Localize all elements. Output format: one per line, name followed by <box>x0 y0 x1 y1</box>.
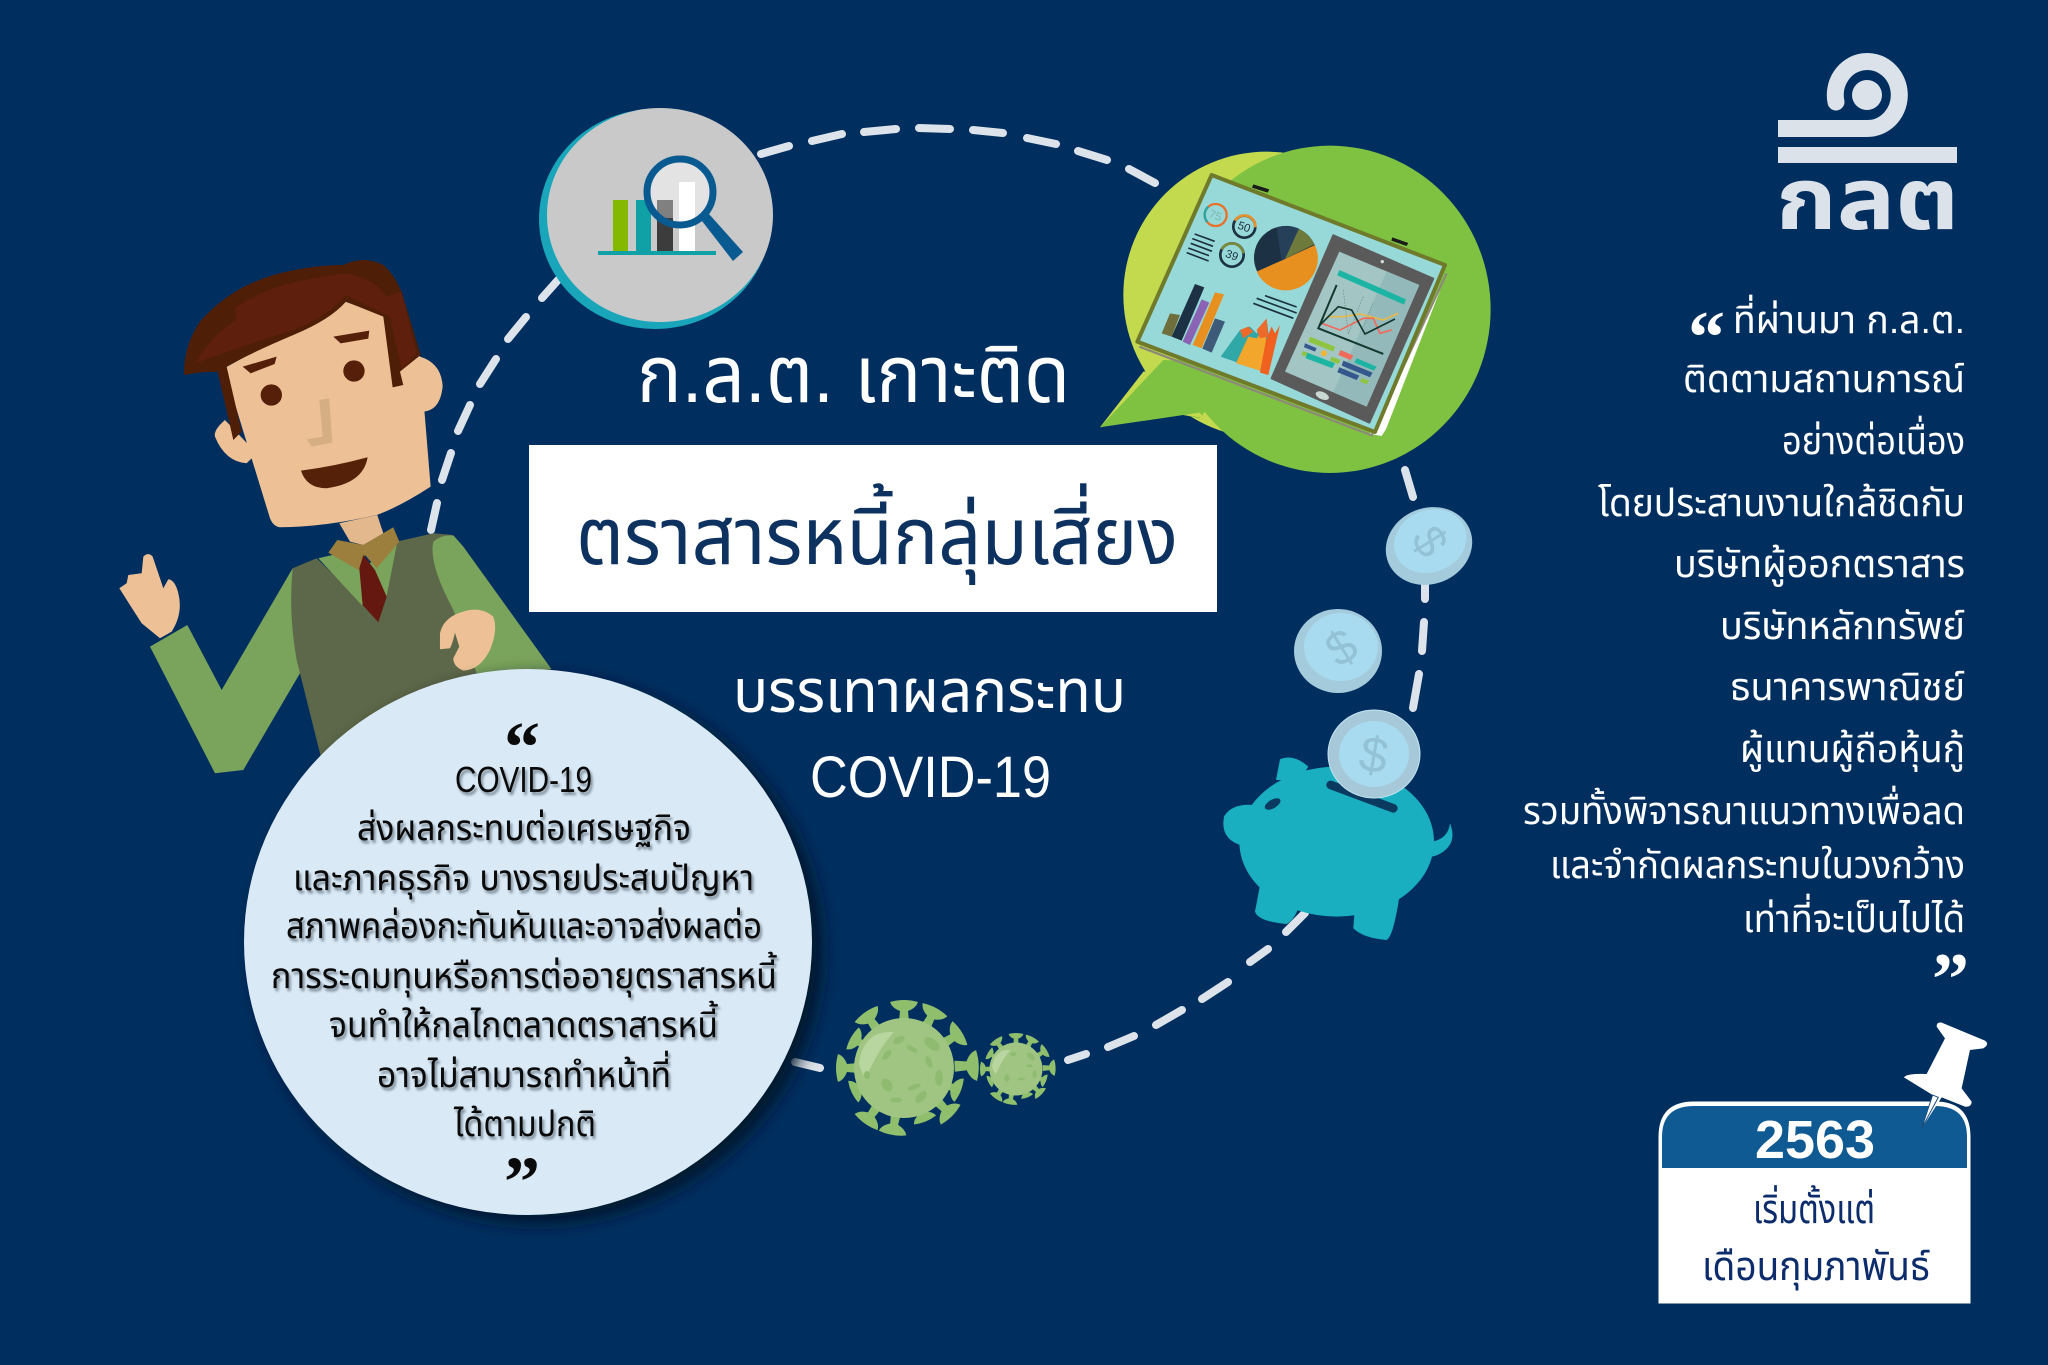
bubble quote text: จนทำให้กลไกตลาดตราสารหนี้ <box>329 1000 718 1045</box>
title: white banner: ตราสารหนี้กลุ่มเสี่ยง <box>576 483 1178 585</box>
tablet <box>1272 235 1433 423</box>
text block: SEC statement: บริษัทผู้ออกตราสาร <box>1674 544 1965 587</box>
panel: COVID-19 impact bubble <box>244 669 822 1223</box>
mouth <box>301 457 368 488</box>
bubble quote text: สภาพคล่องกะทันหันและอาจส่งผลต่อ <box>288 908 764 949</box>
right arm <box>432 535 552 673</box>
bubble quote text: COVID-19 <box>455 759 592 800</box>
text block: SEC statement: เท่าที่จะเป็นไปได้ <box>1743 893 1965 941</box>
nose <box>307 398 332 447</box>
icon: push pin <box>1904 1022 1987 1128</box>
bubble quote text <box>271 707 779 1222</box>
coin 1: $ <box>1401 517 1459 566</box>
bubble quote text: อาจไม่สามารถทำหน้าที่ <box>379 1053 673 1098</box>
bubble quote text: ส่งผลกระทบต่อเศรษฐกิจ <box>359 810 693 851</box>
gauge rings <box>1205 204 1227 226</box>
subtitle <box>733 658 1126 810</box>
face <box>224 302 431 527</box>
title: white banner <box>529 445 1217 612</box>
text block: SEC statement: และจำกัดผลกระทบในวงกว้าง <box>1550 845 1965 887</box>
subtitle: บรรเทาผลกระทบ <box>733 658 1126 725</box>
vest <box>291 533 550 807</box>
text block: SEC statement: ติดตามสถานการณ์ <box>1683 359 1965 401</box>
bubble quote text: “ <box>504 707 540 787</box>
icon: large virus <box>836 1000 979 1137</box>
bubble quote text: อาจไม่สามารถทำหน้าที่ <box>377 1050 671 1095</box>
raised hand <box>119 554 180 638</box>
coin 1 <box>1374 494 1484 598</box>
bubble quote text: และภาคธุรกิจ บางรายประสบปัญหา <box>293 857 754 899</box>
date card: 2563 <box>1755 1110 1875 1170</box>
tie <box>359 555 387 622</box>
hair <box>184 260 421 440</box>
date card: เริ่มตั้งแต่ <box>1753 1184 1875 1232</box>
icon: small virus <box>980 1033 1056 1106</box>
ears <box>420 357 443 412</box>
logo: SEC Thailand: กลต <box>1776 152 1959 248</box>
icon: piggy bank <box>1223 757 1452 940</box>
bubble quote text: ส่งผลกระทบต่อเศรษฐกิจ <box>357 807 691 848</box>
dashboard board: 75 <box>1207 208 1223 224</box>
text block: SEC statement <box>1523 294 1969 1021</box>
area chart <box>1221 320 1270 371</box>
bubble quote text: จนทำให้กลไกตลาดตราสารหนี้ <box>331 1003 720 1048</box>
eyes <box>261 384 282 406</box>
bubble quote text: และภาคธุรกิจ บางรายประสบปัญหา <box>295 860 756 902</box>
dashboard board <box>1137 175 1447 436</box>
text block: SEC statement: บริษัทหลักทรัพย์ <box>1720 606 1965 648</box>
bubble quote text: สภาพคล่องกะทันหันและอาจส่งผลต่อ <box>286 905 762 946</box>
text block: SEC statement: “ <box>1688 297 1725 379</box>
tablet dashboard blocks <box>1308 337 1335 352</box>
character: businessman <box>119 260 552 807</box>
icon: magnifier over bar chart <box>539 108 773 329</box>
bubble back <box>1123 152 1410 438</box>
text block: SEC statement: โดยประสานงานใกล้ชิดกับ <box>1598 483 1965 525</box>
coin 3 <box>1328 710 1420 798</box>
text block: SEC statement: ที่ผ่านมา ก.ล.ต. <box>1733 294 1965 342</box>
bubble quote text: การระดมทุนหรือการต่ออายุตราสารหนี้ <box>271 951 777 997</box>
collar <box>328 527 399 570</box>
dashboard board: 50 <box>1236 220 1252 235</box>
bubble quote text: ได้ตามปกติ <box>453 1103 596 1144</box>
left sleeve and arm <box>150 568 300 773</box>
text block: SEC statement: ” <box>1932 939 1969 1021</box>
eyebrows <box>243 357 277 373</box>
coin 3: $ <box>1355 725 1392 785</box>
bubble front <box>1169 146 1491 473</box>
shirt v-neck <box>318 542 397 605</box>
lower hand <box>440 610 495 671</box>
text block: SEC statement: ธนาคารพาณิชย์ <box>1730 667 1965 709</box>
coin 2 <box>1294 609 1382 693</box>
text block: SEC statement: ผู้แทนผู้ถือหุ้นกู้ <box>1740 729 1965 772</box>
dashboard board: 39 <box>1224 248 1240 264</box>
date card: เดือนกุมภาพันธ์ <box>1702 1245 1930 1290</box>
title: first line: ก.ล.ต. เกาะติด <box>637 330 1070 419</box>
text block: SEC statement: อย่างต่อเนื่อง <box>1782 415 1965 463</box>
coin 2: $ <box>1316 619 1367 678</box>
dashed circular path <box>431 128 1425 1068</box>
logo: SEC Thailand <box>1776 62 1959 248</box>
bubble quote text: COVID-19 <box>457 762 594 803</box>
icon: speech bubble with tablet dashboard <box>1100 146 1491 473</box>
bubble quote text: ” <box>504 1142 540 1222</box>
date card <box>1660 1103 1969 1302</box>
subtitle: COVID-19 <box>810 745 1051 810</box>
bubble quote text: การระดมทุนหรือการต่ออายุตราสารหนี้ <box>273 954 779 1000</box>
icon: falling coins <box>1294 494 1484 693</box>
pie chart <box>1254 226 1317 289</box>
text block: SEC statement: รวมทั้งพิจารณาแนวทางเพื่อลด <box>1523 785 1965 833</box>
bubble quote text: ได้ตามปกติ <box>455 1106 598 1147</box>
neck <box>339 515 383 545</box>
bar chart <box>1162 313 1180 337</box>
